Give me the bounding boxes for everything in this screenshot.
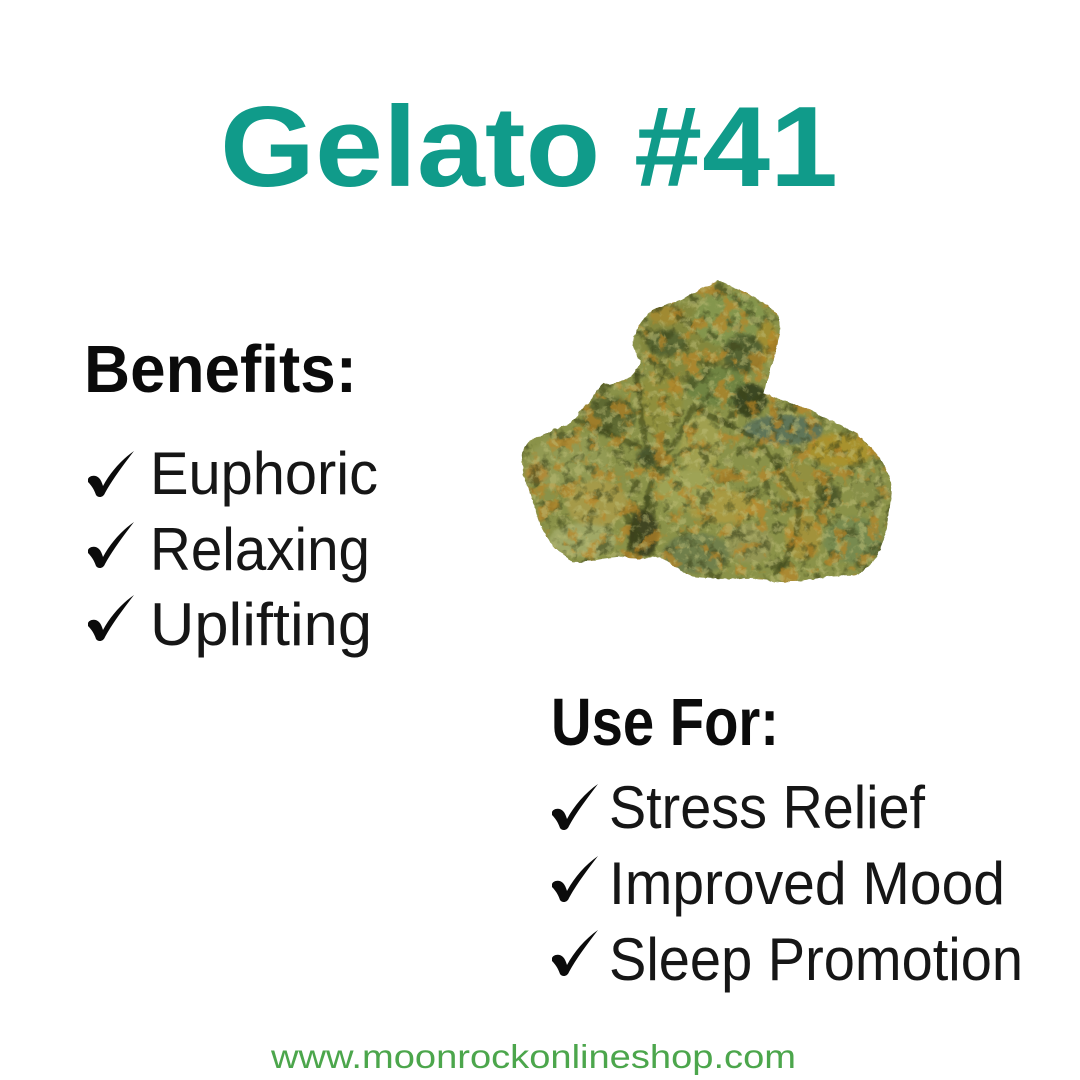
panel: benefits — [84, 332, 378, 658]
image: cannabis bud — [510, 270, 900, 590]
use: improved mood: Improved Mood — [609, 850, 1005, 917]
benefit: relaxing: Relaxing — [150, 516, 370, 583]
title: Gelato #41 — [220, 84, 838, 211]
website url: www.moonrockonlineshop.com — [270, 1038, 796, 1075]
benefit: euphoric: Euphoric — [150, 440, 378, 507]
bud lobe creases — [577, 373, 799, 573]
use: sleep promotion: Sleep Promotion — [609, 926, 1023, 993]
use: stress relief: Stress Relief — [609, 774, 925, 841]
heading: use for: Use For: — [551, 685, 779, 760]
panel: use for — [551, 685, 1023, 993]
benefit: uplifting: Uplifting — [150, 591, 372, 658]
heading: benefits: Benefits: — [84, 332, 357, 407]
infographic canvas — [88, 103, 1020, 1075]
